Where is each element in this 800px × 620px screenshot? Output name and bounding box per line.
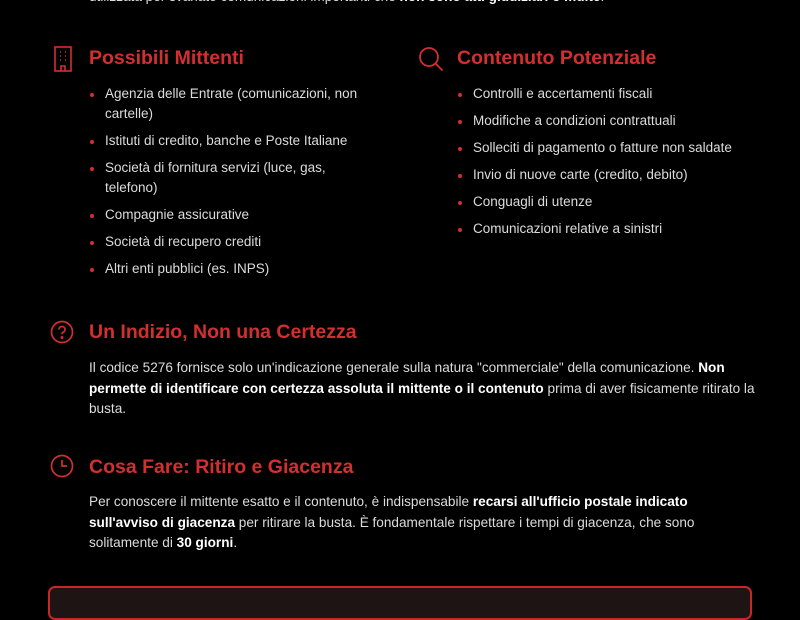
list: Conguagli di utenze [473, 194, 592, 209]
list: Invio di nuove carte (credito, debito) [473, 167, 688, 182]
section: un indizio [50, 320, 755, 416]
paragraph [89, 360, 755, 416]
list: Compagnie assicurative [105, 207, 249, 222]
callout box [48, 586, 752, 620]
list: Comunicazioni relative a sinistri [473, 221, 662, 236]
list: Società di recupero crediti [105, 234, 261, 249]
list: Controlli e accertamenti fiscali [473, 86, 652, 101]
list: cartelle) [105, 106, 153, 121]
paragraph: Per conoscere il mittente esatto e il contenuto, è indispensabile recarsi all'ufficio postale indicato [89, 494, 688, 509]
list: Agenzia delle Entrate (comunicazioni, non [105, 86, 357, 101]
list: Modifiche a condizioni contrattuali [473, 113, 676, 128]
icon: question [50, 320, 74, 344]
heading: Cosa Fare: Ritiro e Giacenza [89, 456, 353, 478]
list: Altri enti pubblici (es. INPS) [105, 261, 269, 276]
heading: Possibili Mittenti [89, 47, 244, 69]
list: Istituti di credito, banche e Poste Italiane [105, 133, 347, 148]
list: Solleciti di pagamento o fatture non saldate [473, 140, 732, 155]
list: telefono) [105, 180, 158, 195]
panel: contenuto potenziale [419, 47, 732, 236]
section: cosa fare [50, 454, 694, 550]
paragraph: Il codice 5276 fornisce solo un'indicazione generale sulla natura "commerciale" della comunicazione. Non [89, 360, 725, 375]
icon: search [419, 47, 444, 72]
list [458, 86, 732, 236]
paragraph: busta. [89, 401, 126, 416]
list [90, 86, 357, 276]
paragraph: permette di identificare con certezza assoluta il mittente o il contenuto prima di aver fisicamente ritirato la [89, 380, 755, 396]
heading: Contenuto Potenziale [457, 47, 656, 69]
panel: possibili mittenti [54, 46, 357, 276]
heading: Un Indizio, Non una Certezza [89, 321, 357, 343]
paragraph: sull'avviso di giacenza per ritirare la busta. È fondamentale rispettare i tempi di giacenza, che sono [89, 514, 694, 530]
icon: clock [50, 454, 74, 478]
paragraph [89, 494, 694, 550]
list: Società di fornitura servizi (luce, gas, [105, 160, 326, 175]
icon: building [54, 46, 72, 72]
paragraph: solitamente di 30 giorni. [89, 535, 237, 550]
